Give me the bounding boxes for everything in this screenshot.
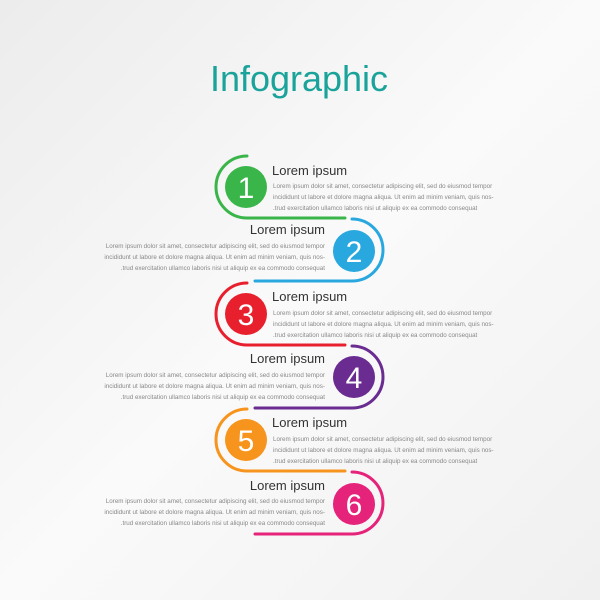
step 2: Lorem ipsum dolor sit amet, consectetur adipiscing elit, sed do eiusmod tempor: [106, 243, 325, 250]
step 6: Lorem ipsum: [250, 478, 325, 493]
step 6: Lorem ipsum dolor sit amet, consectetur adipiscing elit, sed do eiusmod tempor: [106, 498, 325, 505]
step 2: .trud exercitation ullamco laboris nisi ut aliquip ex ea commodo consequat: [121, 265, 325, 272]
step 4: Lorem ipsum dolor sit amet, consectetur adipiscing elit, sed do eiusmod tempor: [106, 372, 325, 379]
step 4: .trud exercitation ullamco laboris nisi ut aliquip ex ea commodo consequat: [121, 394, 325, 401]
step 6: 6: [346, 489, 362, 522]
step 3: [216, 283, 494, 345]
step 3: incididunt ut labore et dolore magna aliqua. Ut enim ad minim veniam, quis nos-: [273, 321, 494, 328]
step 4: incididunt ut labore et dolore magna aliqua. Ut enim ad minim veniam, quis nos-: [104, 383, 325, 390]
step 1: 1: [238, 172, 254, 205]
step 3: .trud exercitation ullamco laboris nisi ut aliquip ex ea commodo consequat: [273, 332, 478, 339]
step 3: Lorem ipsum: [272, 289, 347, 304]
step 4: [104, 346, 383, 408]
step 4: Lorem ipsum: [250, 351, 325, 366]
step 4: 4: [346, 362, 362, 395]
step 2: incididunt ut labore et dolore magna aliqua. Ut enim ad minim veniam, quis nos-: [104, 254, 325, 261]
step 1: .trud exercitation ullamco laboris nisi ut aliquip ex ea commodo consequat: [273, 205, 478, 212]
step 1: Lorem ipsum: [272, 163, 347, 178]
step 2: 2: [346, 236, 362, 269]
step 2: [104, 219, 383, 281]
step 1: Lorem ipsum dolor sit amet, consectetur adipiscing elit, sed do eiusmod tempor: [273, 183, 492, 190]
step 1: [216, 156, 494, 218]
step 6: [104, 472, 383, 534]
step 5: .trud exercitation ullamco laboris nisi ut aliquip ex ea commodo consequat: [273, 458, 478, 465]
step 6: .trud exercitation ullamco laboris nisi ut aliquip ex ea commodo consequat: [121, 520, 325, 527]
step 3: 3: [238, 299, 254, 332]
step 5: incididunt ut labore et dolore magna aliqua. Ut enim ad minim veniam, quis nos-: [273, 447, 494, 454]
step 6: incididunt ut labore et dolore magna aliqua. Ut enim ad minim veniam, quis nos-: [104, 509, 325, 516]
step 5: [216, 409, 494, 471]
step 5: Lorem ipsum: [272, 415, 347, 430]
step 1: incididunt ut labore et dolore magna aliqua. Ut enim ad minim veniam, quis nos-: [273, 194, 494, 201]
step 5: 5: [238, 425, 254, 458]
step 5: Lorem ipsum dolor sit amet, consectetur adipiscing elit, sed do eiusmod tempor: [273, 436, 492, 443]
step 3: Lorem ipsum dolor sit amet, consectetur adipiscing elit, sed do eiusmod tempor: [273, 310, 492, 317]
title: Infographic: [210, 58, 388, 99]
step 2: Lorem ipsum: [250, 222, 325, 237]
